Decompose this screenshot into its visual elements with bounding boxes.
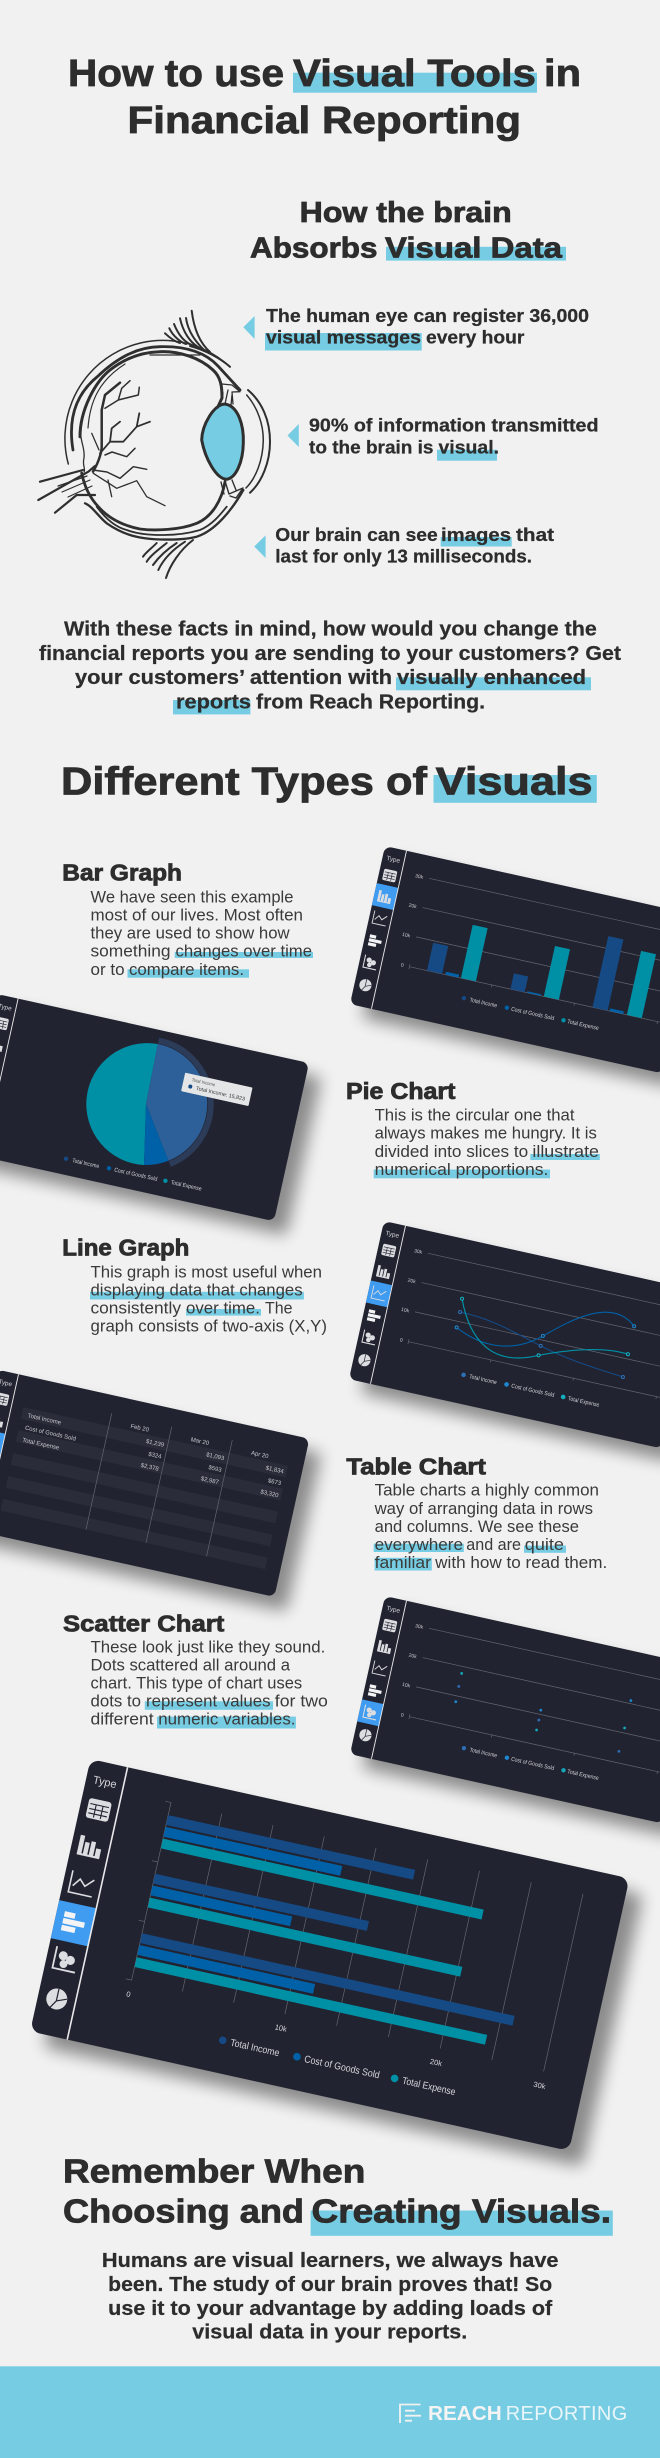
table: $673: [267, 1478, 282, 1487]
text block: pie chart: always makes me hungry. It is: [375, 1124, 597, 1142]
text block: with these facts in mind: visually enhanced: [397, 667, 586, 689]
fact 2: 90% visual: to the brain is: [309, 438, 434, 458]
legend: Cost of Goods Sold: [303, 2054, 381, 2081]
scatter plot: 0: [400, 1712, 404, 1719]
table: Total Expense: [22, 1438, 60, 1452]
panel: table chart screenshot: [0, 1370, 321, 1611]
text block: table chart: with how to read them.: [434, 1553, 607, 1572]
title: Financial Reporting: [128, 100, 521, 142]
text block: scatter chart: Dots scattered all around a: [90, 1655, 291, 1674]
table: $1,834: [265, 1466, 285, 1476]
text block: line graph: The: [265, 1299, 292, 1318]
text block: table chart: everywhere: [375, 1535, 463, 1554]
table: $2,987: [200, 1476, 220, 1486]
bar chart: 20k: [408, 903, 418, 910]
text block: pie chart: [346, 1078, 600, 1179]
legend: Total Income: [469, 1374, 497, 1386]
arrow: [254, 535, 266, 558]
legend: [461, 1746, 599, 1782]
fact 3: 13 milliseconds: [254, 525, 554, 567]
fact 3: 13 milliseconds: that: [516, 525, 554, 545]
panel: horizontal bar chart screenshot: [30, 1759, 643, 2167]
bar chart: 10k: [401, 932, 411, 940]
tooltip: [181, 1073, 253, 1106]
text block: scatter chart: dots to: [90, 1692, 141, 1711]
text block: scatter chart: represent values: [146, 1692, 271, 1711]
table: Apr 20: [250, 1451, 270, 1460]
text block: humans are visual learners: Humans are visual learners, we always have: [102, 2250, 559, 2272]
legend: [63, 1156, 202, 1193]
heading: how the brain absorbs visual data: [250, 197, 566, 265]
text block: with these facts in mind: With these facts in mind, how would you change the: [64, 619, 597, 641]
text block: with these facts in mind: your customers’ attention with: [75, 667, 392, 689]
footer band: [0, 2366, 660, 2458]
table: Mar 20: [190, 1437, 210, 1447]
text block: pie chart: illustrate: [532, 1142, 599, 1161]
horizontal bar chart: 10k: [274, 2022, 288, 2034]
heading: remember when choosing and creating visuals: [63, 2152, 613, 2236]
bar chart: [395, 873, 660, 1029]
horizontal bar chart: 20k: [429, 2057, 443, 2068]
table: $593: [208, 1465, 223, 1474]
text block: line graph: over time.: [186, 1299, 260, 1318]
title: Visual Tools: [293, 53, 536, 95]
heading: remember when choosing and creating visuals: Remember When: [63, 2152, 365, 2190]
text block: bar graph: most of our lives. Most often: [90, 905, 303, 924]
legend: Total Income: [229, 2038, 281, 2059]
title: [68, 53, 581, 142]
sidebar: [0, 995, 18, 1157]
text block: table chart: Table Chart: [346, 1453, 486, 1479]
bar chart: 30k: [414, 873, 424, 881]
sidebar: [30, 1759, 128, 2040]
line chart: 10k: [400, 1307, 410, 1315]
fact 2: 90% visual: visual.: [438, 438, 499, 458]
heading: different types of visuals: [61, 760, 597, 803]
horizontal bar chart: [122, 1801, 588, 2091]
text block: table chart: [346, 1453, 607, 1572]
scatter plot: 20k: [408, 1653, 418, 1660]
text block: line graph: Line Graph: [62, 1234, 189, 1260]
sidebar: [0, 1370, 19, 1532]
bar chart: 0: [400, 962, 404, 969]
scatter plot: 30k: [414, 1623, 424, 1631]
text block: bar graph: compare items.: [129, 960, 244, 979]
heading: how the brain absorbs visual data: Visual Data: [385, 233, 563, 265]
text block: table chart: Table charts a highly common: [375, 1480, 599, 1499]
legend: [218, 2035, 457, 2098]
sidebar: Type: [385, 1230, 400, 1240]
heading: how the brain absorbs visual data: How the brain: [300, 197, 512, 229]
text block: line graph: graph consists of two-axis (X,Y): [90, 1317, 327, 1336]
icon: eye anatomy illustration: [38, 311, 270, 578]
table: $1,093: [205, 1452, 225, 1462]
line chart: 30k: [413, 1248, 423, 1256]
text block: scatter chart: [63, 1610, 328, 1729]
text block: line graph: This graph is most useful when: [90, 1262, 322, 1281]
title: How to use: [68, 53, 284, 95]
table: [1, 1394, 291, 1569]
text block: scatter chart: chart. This type of chart uses: [90, 1673, 302, 1692]
heading: remember when choosing and creating visuals: Creating Visuals.: [312, 2193, 611, 2230]
text block: bar graph: Bar Graph: [62, 860, 182, 886]
panel: pie chart screenshot: [0, 994, 321, 1235]
text block: humans are visual learners: [102, 2250, 559, 2344]
sidebar: Type: [92, 1774, 118, 1791]
sidebar: [350, 1596, 407, 1759]
text block: bar graph: [62, 860, 313, 979]
text block: pie chart: This is the circular one that: [375, 1106, 575, 1124]
legend: Total Expense: [401, 2076, 457, 2098]
legend: Total Income: [469, 1748, 498, 1759]
table: $2,378: [140, 1463, 160, 1473]
panel: line graph screenshot: [349, 1221, 660, 1462]
arrow: [288, 424, 299, 447]
table: Feb 20: [130, 1424, 150, 1434]
table: Cost of Goods Sold: [24, 1426, 76, 1443]
text block: with these facts in mind: [39, 619, 621, 714]
logo: reach reporting: REPORTING: [506, 2403, 627, 2425]
fact 1: 36,000 visual messages: [243, 306, 589, 350]
text block: table chart: familiar: [375, 1553, 431, 1572]
heading: remember when choosing and creating visuals: Choosing and: [63, 2193, 304, 2230]
text block: line graph: [62, 1234, 327, 1336]
line chart: [394, 1248, 660, 1404]
fact 3: 13 milliseconds: last for only 13 milliseconds.: [275, 547, 532, 567]
heading: how the brain absorbs visual data: Absorbs: [250, 233, 378, 265]
fact 1: 36,000 visual messages: visual messages: [266, 328, 421, 348]
legend: Total Expense: [567, 1019, 599, 1032]
text block: bar graph: they are used to show how: [90, 924, 290, 943]
text block: bar graph: or to: [90, 960, 125, 979]
fact 2: 90% visual: [288, 416, 598, 461]
legend: Cost of Goods Sold: [510, 1757, 555, 1772]
heading: different types of visuals: Different Types of: [61, 760, 427, 803]
sidebar: [349, 1221, 406, 1384]
text block: humans are visual learners: visual data in your reports.: [192, 2322, 467, 2344]
horizontal bar chart: 0: [125, 1989, 131, 1999]
logo: reach reporting: [400, 2403, 627, 2425]
legend: Total Expense: [170, 1180, 202, 1193]
legend: Total Income: [72, 1158, 100, 1170]
fact 2: 90% visual: 90% of information transmitted: [309, 416, 598, 436]
text block: table chart: way of arranging data in rows: [374, 1499, 593, 1518]
text block: table chart: quite: [525, 1535, 564, 1554]
tooltip: Total Income: [191, 1077, 216, 1087]
text block: humans are visual learners: been. The study of our brain proves that! So: [108, 2274, 552, 2296]
text block: scatter chart: numeric variables.: [158, 1710, 296, 1729]
text block: scatter chart: These look just like they sound.: [90, 1637, 325, 1656]
text block: bar graph: changes over time: [176, 942, 312, 961]
sidebar: [350, 846, 407, 1009]
text block: line graph: consistently: [90, 1299, 181, 1318]
text block: with these facts in mind: reports: [176, 691, 251, 713]
table: Total Income: [27, 1413, 62, 1427]
fact 3: 13 milliseconds: images: [441, 525, 511, 545]
heading: different types of visuals: Visuals: [436, 760, 593, 803]
text block: humans are visual learners: use it to your advantage by adding loads of: [108, 2298, 553, 2320]
text block: bar graph: We have seen this example: [90, 887, 293, 906]
legend: Total Expense: [567, 1396, 600, 1409]
text block: scatter chart: for two: [275, 1692, 328, 1711]
panel: bar graph screenshot: [350, 846, 660, 1087]
title: in: [544, 53, 581, 95]
text block: table chart: and columns. We see these: [375, 1517, 579, 1536]
line chart: 20k: [407, 1278, 417, 1285]
legend: Total Income: [469, 998, 498, 1009]
legend: Total Expense: [567, 1769, 599, 1782]
table: $324: [148, 1452, 163, 1461]
text block: line graph: displaying data that changes: [90, 1281, 303, 1300]
fact 1: 36,000 visual messages: The human eye can register 36,000: [266, 306, 589, 326]
scatter plot: 10k: [401, 1682, 411, 1690]
sidebar: Type: [386, 1605, 401, 1615]
panel: scatter chart screenshot: [350, 1596, 660, 1837]
sidebar: Type: [386, 855, 401, 865]
legend: Cost of Goods Sold: [510, 1007, 555, 1022]
logo: reach reporting: REACH: [428, 2403, 502, 2425]
legend: [460, 1372, 600, 1409]
legend: Cost of Goods Sold: [511, 1384, 555, 1399]
line chart: 0: [399, 1337, 403, 1344]
legend: [461, 996, 599, 1032]
text block: with these facts in mind: financial reports you are sending to your customers? Get: [39, 643, 621, 665]
fact 1: 36,000 visual messages: every hour: [426, 328, 524, 348]
text block: pie chart: Pie Chart: [346, 1078, 456, 1104]
text block: pie chart: numerical proportions.: [375, 1160, 548, 1179]
pie chart: [86, 1041, 211, 1165]
horizontal bar chart: 30k: [533, 2080, 547, 2091]
lens: [202, 404, 243, 479]
tooltip: Total Income: 15,823: [195, 1086, 246, 1103]
text block: pie chart: divided into slices to: [375, 1142, 528, 1161]
text block: bar graph: something: [90, 942, 170, 961]
text block: table chart: and are: [466, 1535, 521, 1554]
table: $1,239: [145, 1439, 165, 1449]
text block: scatter chart: different: [90, 1710, 154, 1729]
table: $3,320: [260, 1489, 279, 1499]
arrow: [243, 316, 255, 339]
fact 3: 13 milliseconds: Our brain can see: [275, 525, 438, 545]
legend: Cost of Goods Sold: [114, 1168, 158, 1183]
text block: scatter chart: Scatter Chart: [63, 1610, 225, 1636]
text block: with these facts in mind: from Reach Reporting.: [256, 691, 485, 713]
scatter plot: [395, 1623, 660, 1779]
